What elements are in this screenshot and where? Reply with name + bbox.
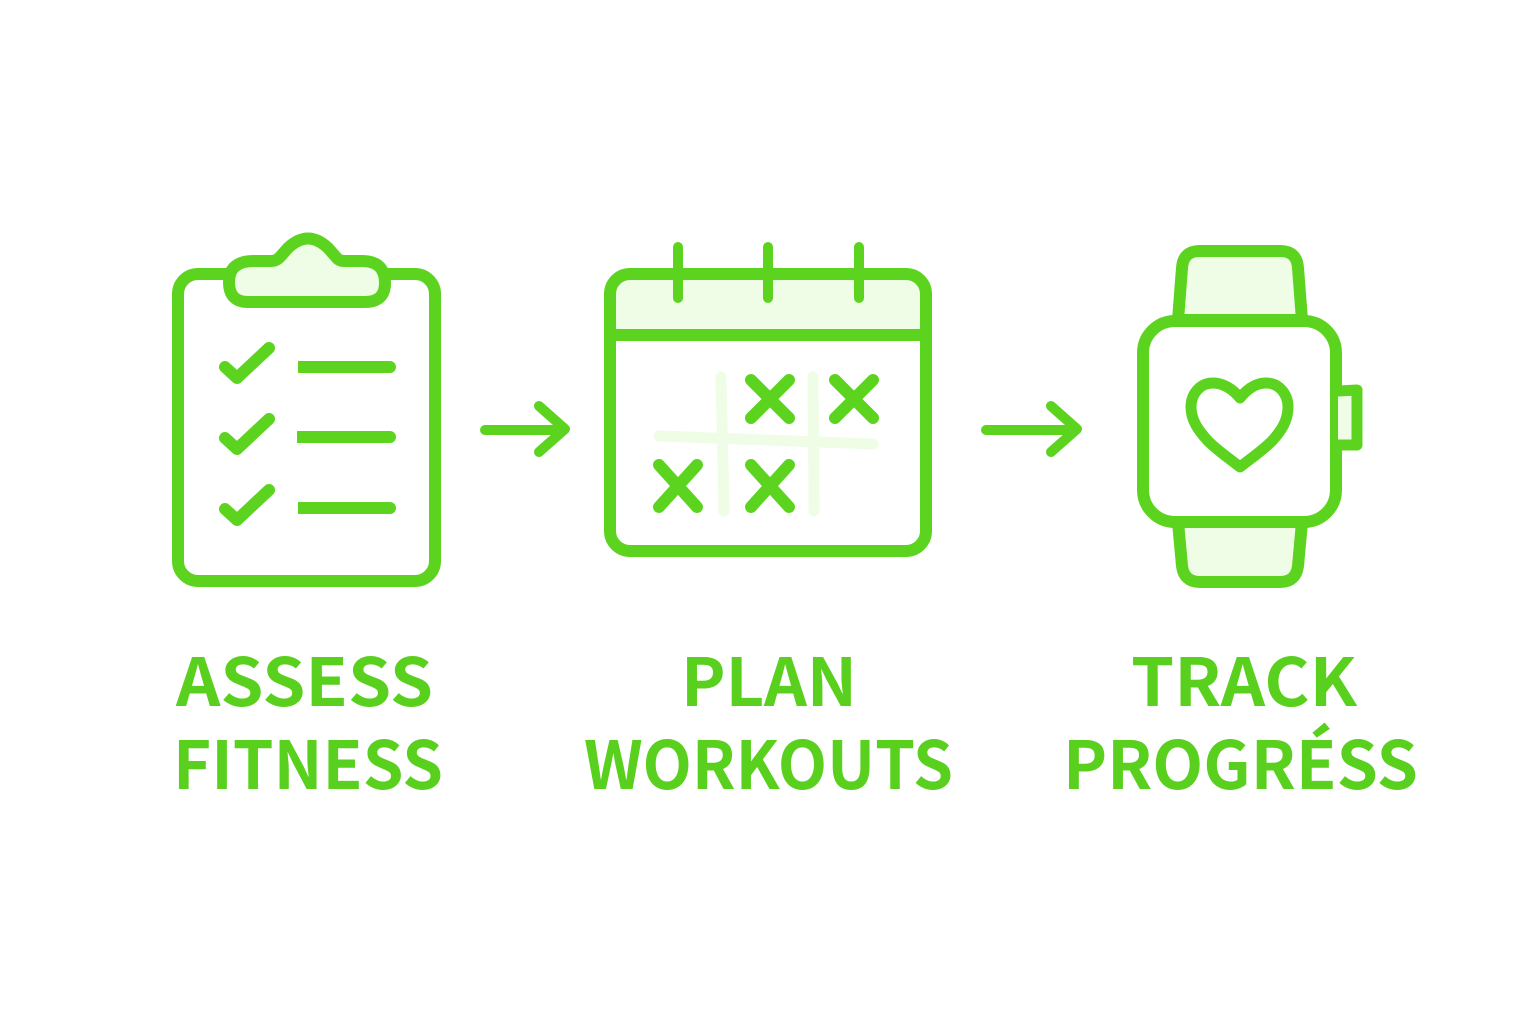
arrow: plan to track xyxy=(986,406,1077,452)
icon: clipboard checklist xyxy=(178,238,435,581)
label: assess fitness xyxy=(173,630,443,809)
label: assess fitness: FITNESS xyxy=(173,713,443,809)
label: plan workouts: WORKOUTS xyxy=(584,713,953,809)
icon: workout calendar xyxy=(610,247,926,551)
label: track progress xyxy=(1063,630,1418,809)
arrow: assess to plan xyxy=(485,406,565,452)
label: plan workouts: PLAN xyxy=(681,630,857,726)
label: track progress: TRACK xyxy=(1131,630,1358,726)
label: track progress: PROGRÉSS xyxy=(1063,713,1418,809)
label: assess fitness: ASSESS xyxy=(175,630,433,726)
calendar grid xyxy=(659,377,873,511)
label: plan workouts xyxy=(584,630,953,809)
icon: smartwatch with heart xyxy=(1143,251,1357,582)
